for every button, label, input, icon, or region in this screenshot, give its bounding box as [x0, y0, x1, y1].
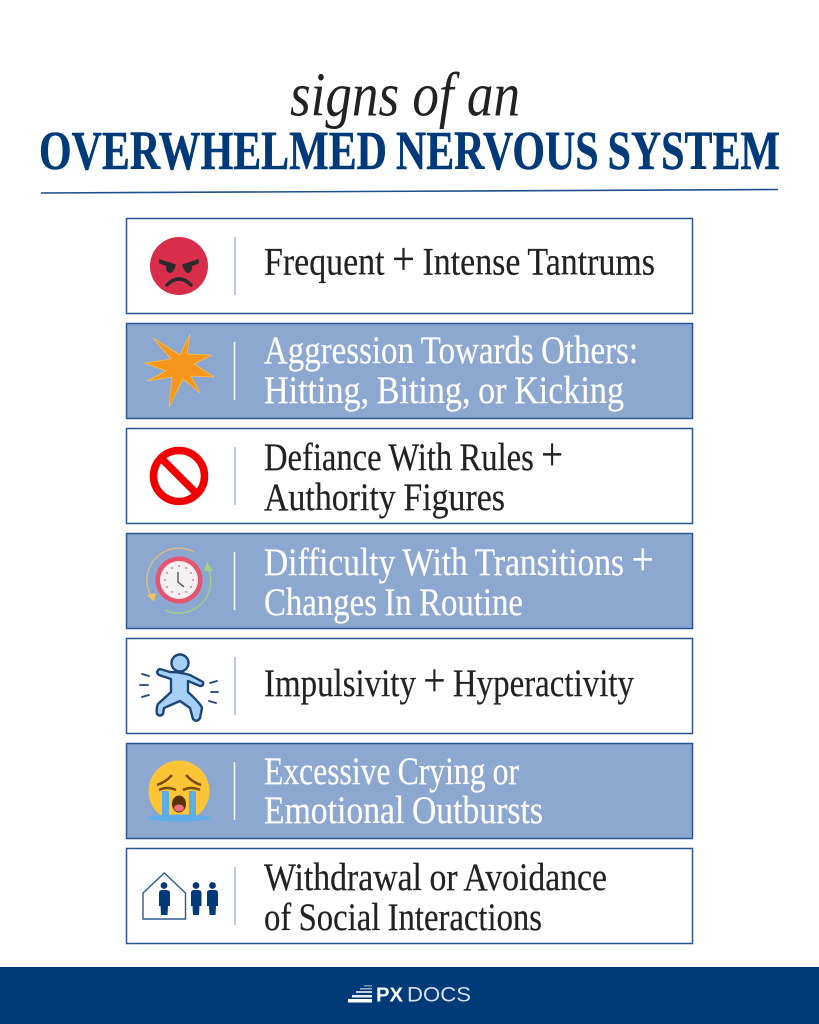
icon: clock with arrows [147, 548, 213, 613]
icon: burst [145, 334, 214, 407]
panel: aggression [126, 324, 692, 418]
label [264, 855, 607, 939]
icon: hyperactive figure [140, 654, 218, 721]
label [264, 429, 563, 519]
label: Excessive Crying or [264, 749, 519, 793]
footer band [0, 967, 819, 1024]
panel: impulsivity [126, 638, 692, 734]
icon: house and people [143, 873, 218, 919]
label: Defiance With Rules + [264, 429, 563, 481]
panel: crying [126, 744, 692, 838]
label: Frequent + Intense Tantrums [264, 234, 655, 286]
panel: tantrums [126, 218, 692, 314]
label: Changes In Routine [264, 580, 523, 624]
logo: PX DOCS [348, 984, 471, 1006]
icon: crying face [148, 760, 210, 822]
label: Impulsivity + Hyperactivity [264, 655, 634, 707]
title line: signs of an: signs of an [290, 62, 520, 130]
label [264, 749, 543, 832]
title [39, 62, 780, 181]
label: Withdrawal or Avoidance [264, 855, 607, 899]
panel: withdrawal [126, 848, 692, 944]
label [264, 534, 654, 624]
label [264, 328, 638, 412]
label: Difficulty With Transitions + [264, 534, 654, 586]
label: Hitting, Biting, or Kicking [264, 368, 624, 412]
icon: no sign [154, 450, 204, 502]
logo: PX DOCS: DOCS [407, 984, 471, 1006]
panel: defiance [126, 428, 692, 524]
label: of Social Interactions [264, 895, 542, 939]
label: Aggression Towards Others: [264, 328, 638, 372]
icon: angry face [150, 237, 208, 295]
logo: PX DOCS: PX [376, 984, 403, 1006]
label: Authority Figures [264, 475, 505, 519]
icon: stairs [348, 985, 372, 1002]
panel: transitions [126, 534, 692, 628]
label: Emotional Outbursts [264, 788, 543, 832]
